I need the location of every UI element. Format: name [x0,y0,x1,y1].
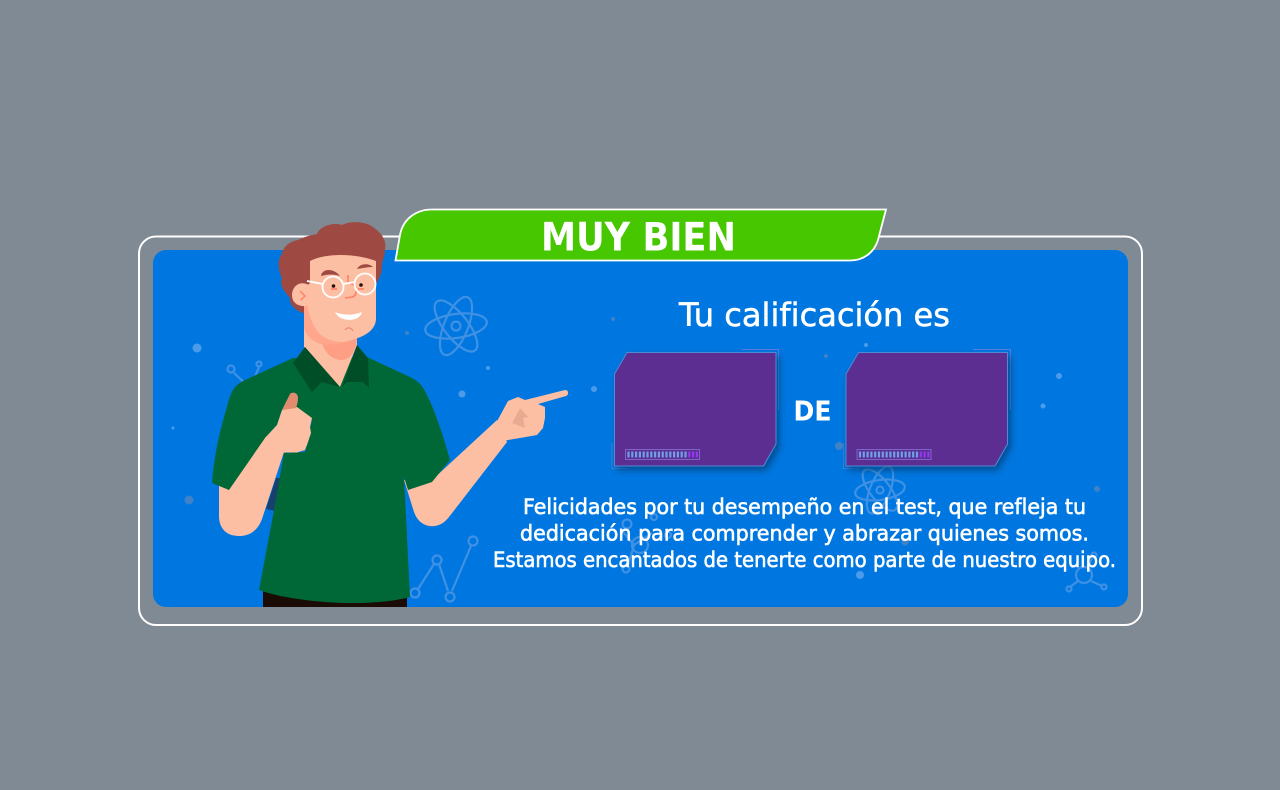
message text: Estamos encantados de tenerte como parte de nuestro equipo. [493,548,1116,572]
left eyebrow [321,270,340,276]
score box 2 [844,350,1010,468]
message text [493,495,1116,572]
glasses [307,274,376,298]
thumb [282,393,298,410]
icon: line chart [410,536,478,602]
message text: Felicidades por tu desempeño en el test, que refleja tu [523,495,1086,519]
panel: blue card [153,250,1128,607]
icon: atom top [424,293,488,359]
neck [304,325,357,387]
illustration: man pointing with thumb up [212,222,568,607]
right eyebrow [357,264,373,269]
decorative dots [172,317,1100,579]
message text: dedicación para comprender y abrazar quienes somos. [520,522,1089,546]
progress strip [626,450,700,460]
background decoration: science icons and dots [228,293,1106,602]
fingers shadow [512,408,528,428]
panel: outer white frame [139,236,1142,625]
label: DE: DE [794,394,832,428]
progress strip [857,450,931,460]
icon: network behind the text [620,514,671,572]
chin mark [345,328,353,331]
shirt [212,357,450,603]
thumbs-up hand [265,393,312,452]
hair [279,222,385,313]
blush under eyes [331,288,364,290]
eyes [332,284,335,288]
right arm [404,420,507,526]
icon: network behind the shoulder [228,362,262,386]
head [279,222,385,345]
ear [292,283,309,306]
heading: Tu calificación es: Tu calificación es [678,296,950,334]
ear detail [300,291,305,300]
pointing hand [495,390,568,441]
banner title: MUY BIEN [541,216,736,260]
smile [335,312,362,320]
icon: molecule bottom right [1066,552,1106,592]
score box 1 [612,350,778,468]
face [305,255,376,343]
banner: MUY BIEN [396,210,886,260]
icon: atom under cards [854,463,906,517]
jaw shade [304,300,348,345]
collar [293,345,369,392]
neck shadow [321,338,357,360]
inner shirt shadow [266,478,282,511]
trousers [263,585,407,607]
nose [345,275,356,298]
left arm [219,430,284,536]
